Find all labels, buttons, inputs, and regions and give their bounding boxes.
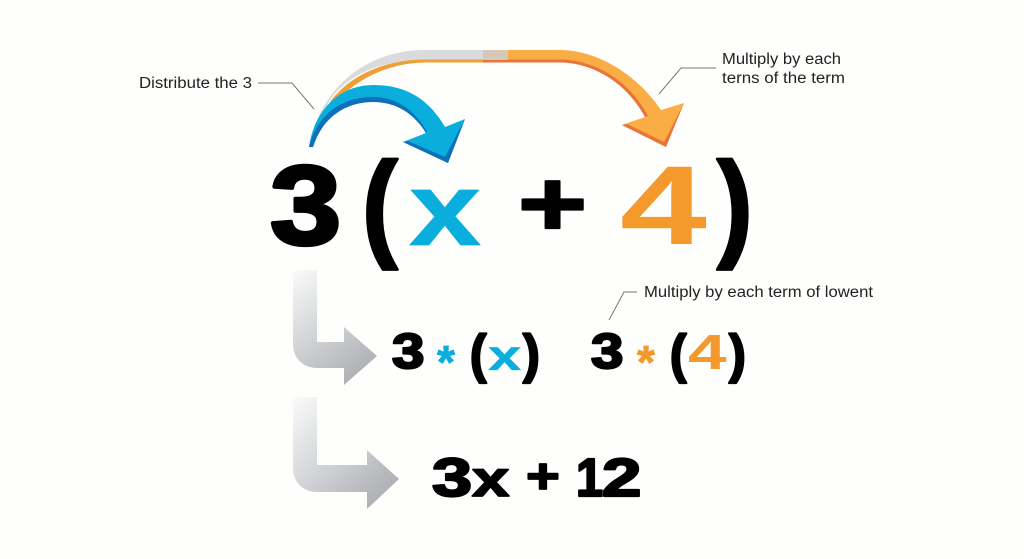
arrow: blue arc bbox=[309, 85, 465, 163]
arrow: gray step one bbox=[293, 270, 377, 385]
main equation: + bbox=[518, 153, 587, 255]
expansion: 3 times 4: 4 bbox=[688, 324, 727, 380]
arrow: gray step two bbox=[293, 397, 399, 509]
callout: multiply by each terns bbox=[659, 51, 845, 94]
main equation bbox=[270, 137, 753, 270]
arrow: large gray to orange arc bbox=[311, 50, 684, 147]
main equation: ) bbox=[717, 137, 753, 270]
main equation: x bbox=[409, 151, 481, 267]
callout: distribute the 3 bbox=[139, 75, 314, 109]
result: 3x + 12: + bbox=[526, 449, 560, 504]
expansion: 3 times 4: 3 bbox=[591, 324, 623, 379]
callout: multiply by each term of lowent: Multiply by each term of lowent bbox=[644, 284, 874, 301]
expansion: 3 times x: * bbox=[437, 336, 455, 388]
result: 3x + 12 bbox=[432, 448, 641, 508]
expansion: 3 times 4: ) bbox=[729, 324, 746, 383]
result: 3x + 12: 2 bbox=[602, 448, 641, 508]
result: 3x + 12: 1 bbox=[576, 448, 603, 508]
callout: multiply by each terns: terns of the term bbox=[722, 70, 845, 87]
result: 3x + 12: x bbox=[472, 450, 509, 507]
callout: multiply by each term of lowent bbox=[609, 284, 874, 320]
main equation: ( bbox=[362, 137, 398, 270]
expansion: 3 times x: 3 bbox=[392, 324, 424, 379]
callout: multiply by each terns: Multiply by each bbox=[722, 51, 841, 68]
expansion: 3 times x: ) bbox=[523, 324, 540, 383]
expansion: 3 times x: ( bbox=[470, 325, 486, 383]
main equation: 4 bbox=[620, 142, 707, 268]
result: 3x + 12: 3 bbox=[432, 449, 472, 508]
main equation: 3 bbox=[270, 142, 341, 268]
expansion: 3 times x bbox=[392, 324, 540, 388]
expansion: 3 times x: x bbox=[488, 332, 522, 379]
expansion: 3 times 4: * bbox=[637, 336, 655, 388]
callout: distribute the 3: Distribute the 3 bbox=[139, 75, 252, 92]
expansion: 3 times 4 bbox=[591, 324, 746, 388]
expansion: 3 times 4: ( bbox=[670, 325, 686, 383]
